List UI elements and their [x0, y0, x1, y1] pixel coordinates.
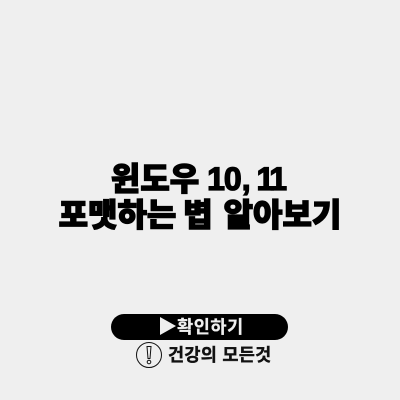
title: 윈도우 10, 11 [111, 161, 287, 197]
button: confirm [111, 314, 288, 340]
icon: play triangle [160, 317, 176, 335]
title: 포맷하는 볍 알아보기 [59, 196, 341, 232]
brand text: 건강의 모든것 [168, 345, 272, 365]
title [59, 161, 341, 232]
button label: 확인하기 [177, 317, 244, 337]
icon: exclamation circle [136, 342, 162, 368]
